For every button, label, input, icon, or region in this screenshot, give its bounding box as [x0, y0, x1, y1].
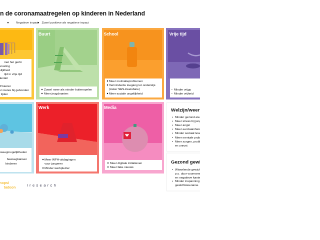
- panel: Werk: [36, 102, 99, 174]
- logo: partner: tadeon: [4, 186, 16, 190]
- text block: tijd in vrije tijd: [4, 72, 22, 76]
- text block: –: [171, 92, 173, 96]
- title: n de coronamaatregelen op kinderen in Nederland: [0, 10, 145, 18]
- list: gewichtstoename: [175, 183, 199, 187]
- icon: toys: [186, 53, 200, 68]
- icon: toys: [0, 124, 14, 134]
- list: •: [172, 123, 173, 127]
- list: Meer angst: [175, 123, 190, 127]
- icon: chairs and table: [0, 42, 15, 55]
- list: •: [172, 179, 173, 183]
- text block: Meer motivatieproblemen: [109, 79, 143, 83]
- text block: Meer jeugdmarten: [44, 92, 69, 96]
- text block: Meer fake nieuws: [110, 165, 134, 169]
- list: •: [172, 115, 173, 119]
- text block: –: [171, 88, 173, 92]
- list: [172, 115, 209, 148]
- text block: met het gezin: [4, 60, 22, 64]
- text block: Zowel meer als minder buitenspelen: [44, 88, 93, 92]
- text block: (zeker SES-kwetsbare): [109, 87, 140, 91]
- legend: [7, 21, 89, 25]
- legend: Negatieve impact: [16, 21, 39, 25]
- list: •: [172, 136, 173, 140]
- icon: pumpkin with heart: [122, 124, 148, 152]
- text block: Meer WFH-uitdagingen: [44, 158, 76, 162]
- text block: beweegkansen: [7, 157, 27, 161]
- heading: Vrije tijd: [169, 32, 187, 36]
- list: •: [172, 127, 173, 131]
- list: [172, 167, 223, 187]
- heading: Werk: [38, 105, 50, 110]
- list: •: [172, 140, 173, 144]
- panel: Thuis: [0, 102, 34, 174]
- text block: Meer digitale initiatieven: [110, 161, 143, 165]
- list: en onrust: [175, 144, 188, 148]
- list: •: [172, 167, 173, 171]
- text block: [170, 78, 202, 98]
- list: •: [172, 131, 173, 135]
- text block: [40, 86, 97, 97]
- text block: Meer sociale ongelijkheid: [109, 92, 143, 96]
- text block: tijden: [1, 92, 8, 96]
- text block: Minder werkplezier: [44, 166, 70, 170]
- panel: gezin: [0, 28, 34, 100]
- list: •: [172, 119, 173, 123]
- text block: Verminderde toegang tot onderwijs: [109, 83, 156, 87]
- card: Welzijn: [167, 102, 220, 152]
- text block: [105, 160, 162, 170]
- heading: Buurt: [38, 32, 51, 36]
- text block: voor jongeren: [44, 162, 63, 166]
- text block: Minder vrijgo: [174, 88, 192, 92]
- card: Gezond gewicht: [167, 153, 223, 191]
- text block: kinderen: [5, 162, 17, 166]
- logo: iresearch: iresearch: [27, 184, 56, 188]
- panel: School: [102, 28, 164, 100]
- icon: slide: [54, 47, 83, 72]
- text block: [0, 59, 32, 97]
- text block: [0, 148, 32, 172]
- heading: Media: [104, 105, 117, 110]
- text block: [39, 155, 97, 172]
- text block: [105, 78, 162, 98]
- panel: Vrije tijd: [166, 28, 202, 100]
- list: Meer eenzaamheid: [175, 127, 200, 131]
- icon: stairs: [57, 123, 77, 142]
- legend: Zowel positieve als negatieve impact: [42, 21, 89, 25]
- panel: Buurt: [36, 28, 99, 100]
- heading: School: [104, 32, 118, 36]
- text block: Minder vrijheid: [174, 92, 194, 96]
- icon: bottle: [127, 42, 137, 67]
- panel: Media: [102, 102, 164, 174]
- logo: partner: [0, 181, 16, 190]
